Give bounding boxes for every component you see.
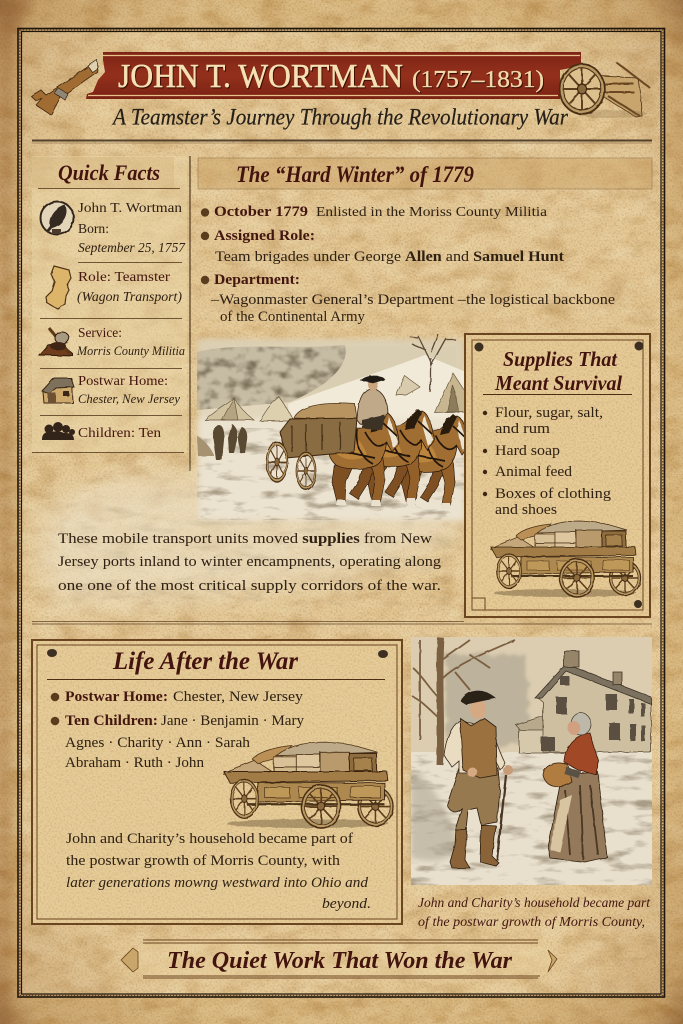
postwar details: Postwar Home: — [65, 689, 168, 705]
text block: service details: Assigned Role: — [214, 228, 315, 244]
icon: wagon wheel and cart — [560, 62, 650, 118]
fact: service: Service: — [78, 325, 122, 340]
nails — [47, 649, 388, 658]
caption — [418, 895, 651, 929]
illustration: wagon in the snow — [38, 334, 469, 605]
title text: JOHN T. WORTMAN — [118, 58, 403, 95]
fact: postwar home: Chester, New Jersey — [78, 391, 180, 406]
subtitle: A Teamster’s Journey Through the Revolutionary War — [111, 104, 569, 130]
heading: hard winter — [198, 158, 652, 189]
fact: postwar home: Postwar Home: — [78, 373, 168, 388]
icon: loaded wagon — [224, 742, 393, 828]
heading: hard winter: The “Hard Winter” of 1779 — [236, 162, 474, 187]
supplies list: and rum — [495, 421, 550, 437]
text block: transport units: one one of the most critical supply corridors of the war. — [58, 578, 441, 594]
supplies heading: Supplies That — [503, 347, 618, 371]
supplies list: Flour, sugar, salt, — [495, 405, 603, 421]
supplies list: and shoes — [495, 502, 557, 518]
text block: service details: Team brigades under George Allen and Samuel Hunt — [215, 249, 564, 265]
text block: service details: of the Continental Army — [220, 309, 366, 325]
icon: musket and pack — [39, 328, 73, 356]
footer banner — [121, 940, 557, 978]
household paragraph: the postwar growth of Morris County, with — [66, 853, 341, 869]
supplies list — [483, 405, 612, 518]
fact: service: Morris County Militia — [76, 343, 185, 358]
text block: service details: October 1779 — [214, 204, 308, 220]
caption: of the postwar growth of Morris County, — [418, 914, 645, 929]
fact: role: Role: Teamster — [78, 270, 170, 285]
icon: family silhouettes — [42, 422, 75, 440]
supply wagon and driver — [266, 377, 388, 490]
icon: loaded wagon — [491, 521, 641, 597]
fact: role — [77, 270, 183, 304]
postwar details: Chester, New Jersey — [173, 689, 304, 705]
title dates: (1757–1831) — [412, 66, 544, 93]
fact: name and birth: Born: — [78, 221, 109, 236]
soldiers — [197, 424, 247, 460]
household paragraph: beyond. — [322, 896, 371, 912]
household paragraph — [66, 831, 371, 912]
supplies list: Hard soap — [495, 443, 560, 459]
quick facts heading: Quick Facts — [58, 160, 160, 185]
postwar details — [51, 689, 304, 771]
icon: new jersey map — [46, 266, 71, 309]
title banner — [86, 52, 581, 99]
illustration: john and charity at the homestead — [411, 637, 652, 885]
household paragraph: John and Charity’s household became part of — [66, 831, 353, 847]
text block: service details: –Wagonmaster General’s Department –the logistical backbone — [210, 292, 615, 308]
panel: quick facts — [32, 156, 187, 453]
fact: postwar home — [78, 373, 180, 406]
life heading: Life After the War — [112, 648, 298, 675]
nails — [474, 342, 644, 608]
fact: name and birth: September 25, 1757 — [78, 240, 186, 255]
panel: supplies that meant survival — [465, 334, 650, 617]
text block: service details: Enlisted in the Moriss County Militia — [316, 205, 548, 220]
footer banner: The Quiet Work That Won the War — [167, 948, 513, 974]
text block: transport units: Jersey ports inland to winter encampnents, operating along — [58, 554, 442, 570]
figure: john — [444, 691, 513, 868]
text block: service details: Department: — [214, 272, 300, 288]
icon: quill medallion — [40, 202, 74, 234]
stone house — [516, 651, 651, 753]
text block: transport units: These mobile transport units moved supplies from New — [58, 531, 432, 547]
caption: John and Charity’s household became part — [418, 895, 651, 910]
fact: children: Children: Ten — [78, 426, 161, 441]
postwar details: Jane · Benjamin · Mary — [161, 713, 304, 729]
household paragraph: later generations mowng westward into Ohio and — [66, 875, 369, 891]
fact: service — [76, 325, 185, 358]
icon: musket — [31, 60, 98, 115]
postwar details: Agnes · Charity · Ann · Sarah — [65, 735, 251, 751]
postwar details: Abraham · Ruth · John — [65, 755, 205, 771]
camp tents — [205, 334, 466, 421]
postwar details: Ten Children: — [65, 713, 158, 729]
panel: life after the war — [32, 640, 402, 924]
fact: name and birth: John T. Wortman — [78, 201, 182, 216]
text block: transport units — [58, 531, 442, 594]
bare tree — [412, 638, 515, 765]
text block: service details — [201, 204, 615, 325]
fact: name and birth — [78, 201, 186, 255]
supplies heading — [494, 347, 622, 395]
supplies list: Boxes of clothing — [495, 486, 612, 502]
fact: role: (Wagon Transport) — [77, 289, 183, 304]
icon: house — [42, 378, 74, 403]
horse team — [327, 409, 469, 509]
figure: charity — [543, 713, 607, 862]
supplies list: Animal feed — [495, 464, 573, 480]
supplies heading: Meant Survival — [494, 371, 622, 395]
snow bank — [411, 770, 460, 861]
